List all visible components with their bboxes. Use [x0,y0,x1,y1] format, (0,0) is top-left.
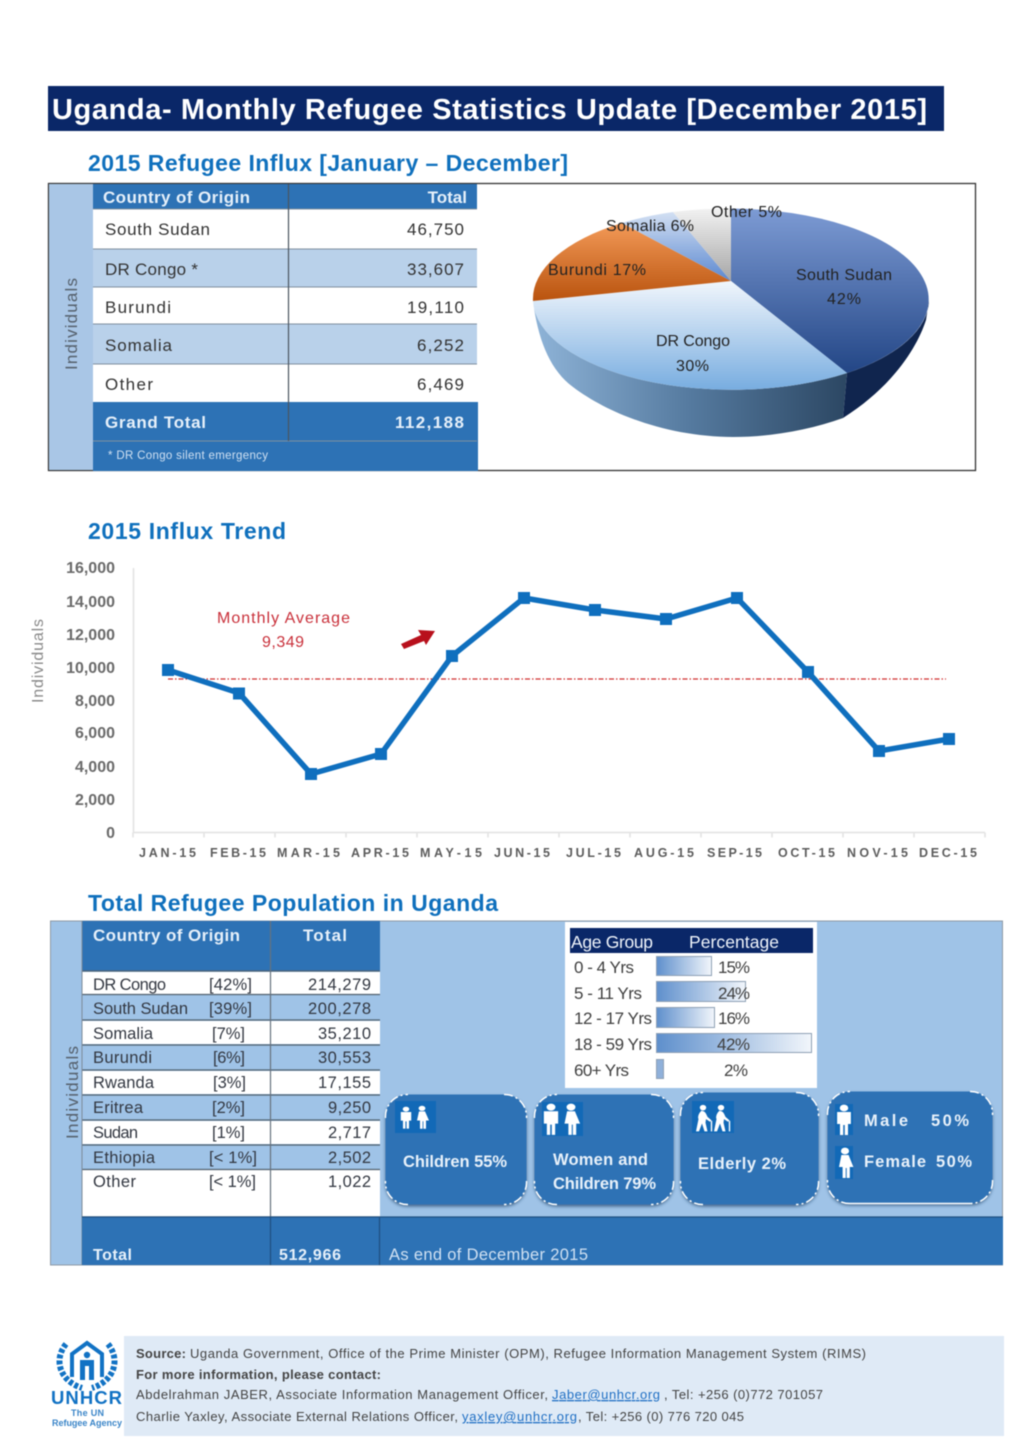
population table: DR Congo [93,976,166,994]
footer: source and contacts: , Tel: +256 (0) 776 720 045 [578,1409,744,1424]
y axis labels [66,560,115,842]
card: male and female: 50% [936,1153,972,1171]
influx table: Other [105,375,153,394]
y axis labels: 16,000 [66,560,115,577]
age group table: 15% [718,958,750,977]
influx table: Somalia [105,336,173,355]
population table: [< 1%] [209,1149,257,1167]
icon: children [395,1101,436,1133]
x axis labels: JAN-15 [139,846,196,860]
callout: monthly average [217,610,350,651]
card: women and children: Children 79% [553,1175,656,1193]
callout: monthly average: 9,349 [262,634,304,651]
age group table: 42% [717,1035,750,1054]
x axis labels: FEB-15 [210,846,266,860]
population table: Eritrea [93,1099,144,1117]
card: elderly: Elderly 2% [698,1155,786,1173]
footer: source and contacts [124,1336,1004,1436]
icon: elderly [692,1101,734,1133]
card: children [385,1094,527,1205]
x axis labels: OCT-15 [778,846,835,860]
population table: [7%] [212,1025,245,1043]
logo: UNHCR: The UN [71,1408,104,1418]
influx table: Total [428,188,467,207]
population table: 9,250 [328,1099,371,1117]
title banner [48,86,944,131]
total bar: Total [93,1247,132,1264]
influx table: 19,110 [407,298,464,317]
footer: source and contacts: Charlie Yaxley, Associate External Relations Officer, [136,1409,458,1424]
x axis labels: SEP-15 [707,846,762,860]
y axis labels: 0 [106,825,115,842]
footer: source and contacts: Jaber@unhcr.org [552,1387,660,1402]
x axis labels: JUN-15 [494,846,550,860]
pie chart: Other 5% [711,204,782,221]
data series [162,592,955,780]
heading: total refugee population: Total Refugee Population in Uganda [88,890,498,916]
age group table: 60+ Yrs [574,1061,629,1080]
logo: UNHCR: UNHCR [51,1387,122,1408]
influx table: 46,750 [407,220,464,239]
population table: [2%] [212,1099,245,1117]
age group table: 2% [724,1061,748,1080]
population table: 35,210 [318,1025,371,1043]
footer: source and contacts: Abdelrahman JABER, Associate Information Management Officer, [136,1387,548,1402]
population table: 17,155 [318,1074,371,1092]
influx table: 6,252 [417,336,464,355]
population table: Burundi [93,1049,152,1067]
total bar [82,1217,1003,1265]
population table: Total [303,926,347,945]
population table: [1%] [212,1124,245,1142]
influx table: Individuals [62,278,81,370]
population table: 2,717 [328,1124,371,1142]
panel: total refugee population [50,921,1003,1265]
population table: 200,278 [308,1000,371,1018]
icon: woman and child [542,1102,583,1136]
pie chart: 30% [676,358,709,375]
card: male and female: Female [864,1153,926,1171]
x axis labels: DEC-15 [919,846,977,860]
age group table: 24% [718,984,750,1003]
influx table: South Sudan [105,220,210,239]
age group table: 18 - 59 Yrs [574,1035,652,1054]
influx table: DR Congo * [105,260,198,279]
population table: Rwanda [93,1074,155,1092]
footer: source and contacts: Uganda Government, Office of the Prime Minister (OPM), Refugee Information Management System (RIMS) [190,1346,866,1361]
footer: source and contacts: , Tel: +256 (0)772 701057 [664,1387,823,1402]
pie chart: South Sudan [796,267,892,284]
total bar: 512,966 [279,1247,341,1264]
y axis labels: 2,000 [75,792,115,809]
population table: South Sudan [93,1000,188,1018]
logo: UNHCR: Refugee Agency [52,1418,122,1428]
x axis labels: AUG-15 [634,846,694,860]
y axis labels: 4,000 [75,759,115,776]
population table: Other [93,1173,136,1191]
card: women and children [534,1094,674,1205]
card: male and female: Male [864,1112,908,1130]
population table: [6%] [213,1049,245,1067]
population table: 1,022 [328,1173,371,1191]
icon: laurel and shelter [59,1343,115,1388]
pie chart: DR Congo [656,333,730,350]
age group table [565,922,817,1088]
total bar: As end of December 2015 [389,1246,588,1264]
population table: Individuals [63,1046,82,1139]
title banner: Uganda- Monthly Refugee Statistics Update [December 2015] [52,94,927,126]
pie chart: Somalia 6% [606,218,694,235]
card: male and female [827,1091,993,1204]
population table: [3%] [213,1074,246,1092]
age group table: Age Group [571,932,653,952]
influx table: 6,469 [417,375,464,394]
heading: influx trend: 2015 Influx Trend [88,518,286,544]
y axis labels: 14,000 [66,594,115,611]
average line [168,678,946,680]
population table: Sudan [93,1124,138,1142]
influx table: * DR Congo silent emergency [108,450,268,462]
population table: Ethiopia [93,1149,156,1167]
population table: [42%] [209,976,252,994]
population table: 214,279 [308,976,371,994]
population table: Somalia [93,1025,154,1043]
influx table: Country of Origin [103,188,250,207]
age group table: 0 - 4 Yrs [574,958,634,977]
x axis labels: MAR-15 [277,846,340,860]
pie chart: Burundi 17% [548,262,646,279]
population table [63,921,380,1265]
line chart: influx trend [30,560,985,860]
logo: UNHCR [51,1343,122,1428]
panel: influx table and pie [48,184,976,471]
y axis labels: 10,000 [66,660,115,677]
y axis title: Individuals [30,619,47,703]
population table: [39%] [209,1000,252,1018]
influx table: Grand Total [105,413,206,432]
influx table: Burundi [105,298,171,317]
x axis labels [139,846,977,860]
icon: male [835,1104,853,1135]
footer: source and contacts: For more information, please contact: [136,1367,381,1382]
x axis labels: MAY-15 [420,846,482,860]
card: women and children: Women and [553,1151,648,1169]
population table: 2,502 [328,1149,371,1167]
pie chart: 42% [827,291,861,308]
x axis labels: APR-15 [351,846,409,860]
callout: monthly average: Monthly Average [217,610,350,627]
influx table: 33,607 [407,260,464,279]
pie chart [533,204,929,437]
y axis labels: 8,000 [75,693,115,710]
arrow: red trend [401,630,435,649]
influx table [49,184,478,471]
heading: 2015 refugee influx: 2015 Refugee Influx [January – December] [88,150,568,176]
footer: source and contacts: yaxley@unhcr.org [462,1409,577,1424]
card: children: Children 55% [403,1153,507,1171]
influx table: 112,188 [395,413,464,432]
footer: source and contacts: Source: [136,1346,186,1361]
age group table: 16% [718,1009,750,1028]
x axis labels: JUL-15 [566,846,621,860]
population table: Country of Origin [93,926,240,945]
age group table: 5 - 11 Yrs [574,984,642,1003]
population table: 30,553 [318,1049,371,1067]
x axis labels: NOV-15 [847,846,908,860]
population table: [< 1%] [209,1173,256,1191]
icon: female [835,1146,853,1179]
y axis labels: 6,000 [75,725,115,742]
y axis labels: 12,000 [66,627,115,644]
age group table: 12 - 17 Yrs [574,1009,652,1028]
age group table: Percentage [689,932,779,952]
card: elderly [680,1092,819,1205]
card: male and female: 50% [931,1112,969,1130]
